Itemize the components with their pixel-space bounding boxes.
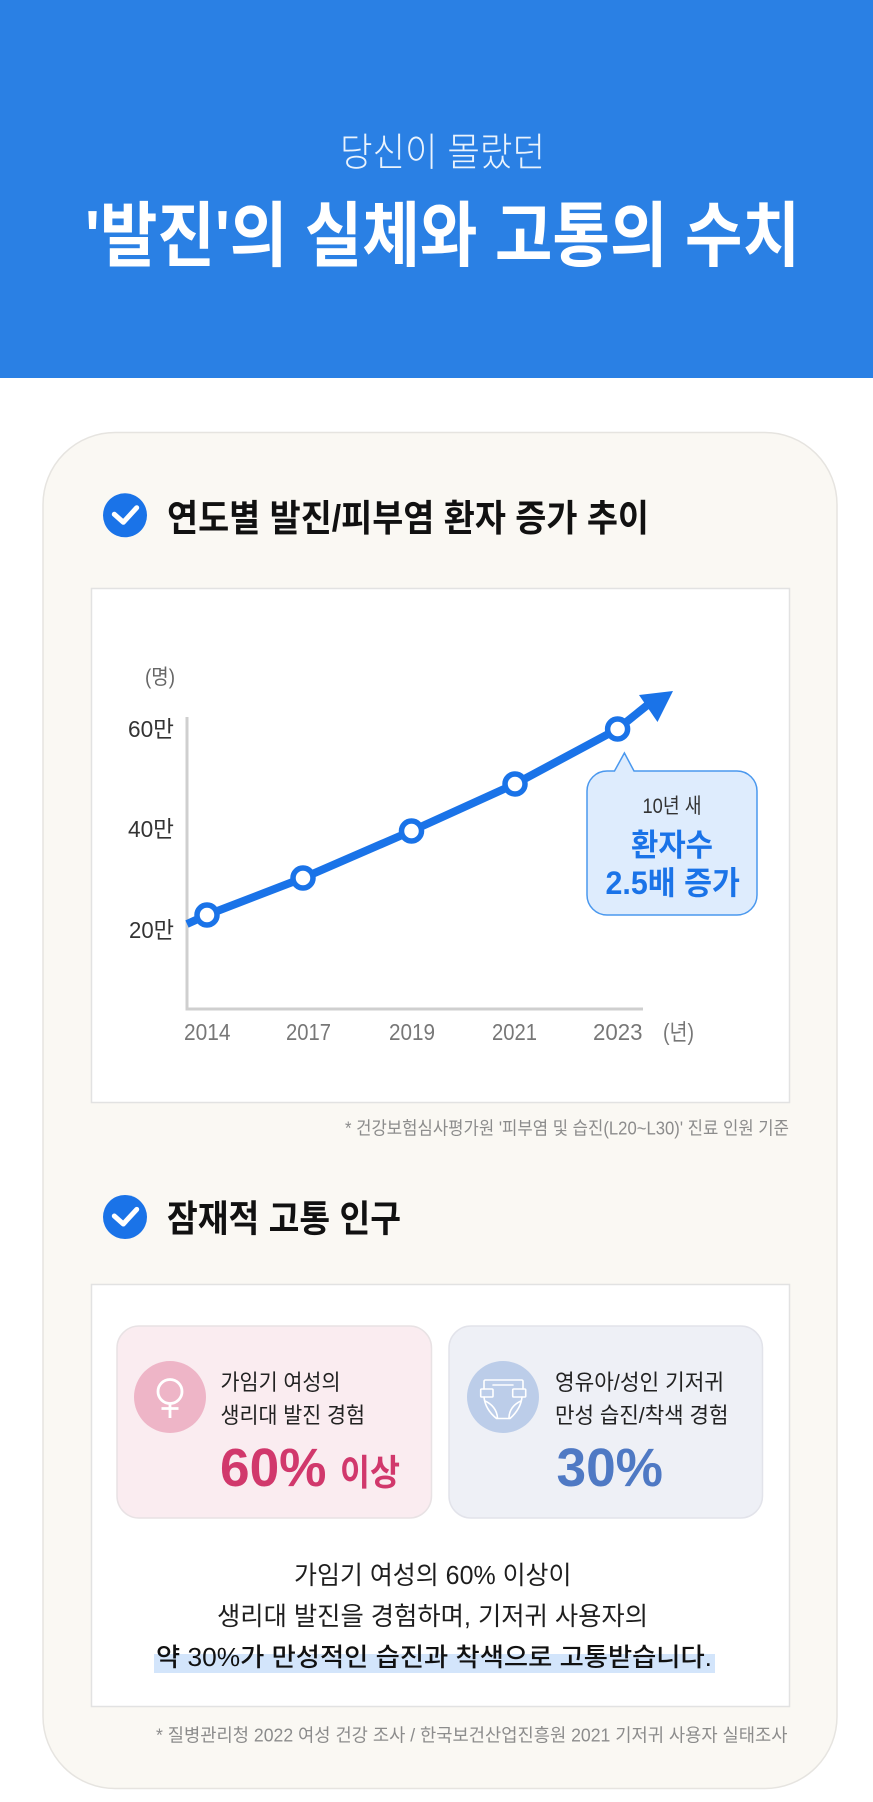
chart axes xyxy=(187,717,643,1009)
callout xyxy=(587,753,757,915)
line chart xyxy=(128,666,757,1045)
footnote: stat sources: * 질병관리청 2022 여성 건강 조사 / 한국보건산업진흥원 2021 기저귀 사용자 실태조사 xyxy=(156,1726,788,1746)
stat card: diaper users: 만성 습진/착색 경험 xyxy=(555,1403,728,1428)
x axis labels: 2014 xyxy=(184,1019,231,1045)
stat value: 30% xyxy=(556,1438,663,1498)
callout: 10년 새 xyxy=(642,795,702,818)
footnote: chart source: * 건강보험심사평가원 '피부염 및 습진(L20~L30)' 진료 인원 기준 xyxy=(345,1118,789,1138)
heading text: 잠재적 고통 인구 xyxy=(167,1198,401,1240)
y axis labels xyxy=(128,716,174,943)
x axis labels: 2023 xyxy=(593,1019,642,1045)
heading text: 연도별 발진/피부염 환자 증가 추이 xyxy=(167,498,649,539)
stat card: diaper users: 영유아/성인 기저귀 xyxy=(555,1370,724,1395)
x axis labels: 2017 xyxy=(286,1019,331,1045)
panel: line chart box xyxy=(92,588,790,1102)
stat card: women: 가임기 여성의 xyxy=(220,1370,340,1395)
icon: check badge xyxy=(103,1195,147,1239)
x axis labels: 2019 xyxy=(389,1019,435,1045)
panel: main card xyxy=(43,432,837,1788)
trend line xyxy=(187,703,650,924)
callout: 환자수 xyxy=(631,828,713,863)
y axis unit: (명) xyxy=(145,666,175,689)
panel: statistics box xyxy=(92,1284,790,1706)
summary text xyxy=(154,1562,715,1673)
main title: '발진'의 실체와 고통의 수치 xyxy=(85,198,800,276)
callout: 2.5배 증가 xyxy=(606,865,740,901)
summary text: 가임기 여성의 60% 이상이 xyxy=(294,1562,572,1590)
section heading: potential population xyxy=(103,1195,401,1240)
highlighted sentence: 약 30%가 만성적인 습진과 착색으로 고통받습니다. xyxy=(156,1644,712,1672)
data points xyxy=(197,719,628,925)
y axis labels: 60만 xyxy=(128,716,174,742)
stat card: diaper users xyxy=(449,1326,762,1518)
x axis labels: (년) xyxy=(663,1019,694,1045)
icon: female symbol xyxy=(134,1361,206,1433)
summary text: 생리대 발진을 경험하며, 기저귀 사용자의 xyxy=(217,1603,648,1631)
stat card: women: 생리대 발진 경험 xyxy=(220,1403,365,1428)
x axis labels xyxy=(184,1019,694,1045)
icon: check badge xyxy=(103,493,147,537)
stat value xyxy=(220,1438,400,1498)
header banner xyxy=(0,0,873,378)
x axis labels: 2021 xyxy=(492,1019,537,1045)
icon: diaper xyxy=(467,1361,539,1433)
y axis labels: 20만 xyxy=(129,917,174,943)
stat value: 이상 xyxy=(340,1452,400,1493)
arrow head xyxy=(639,691,673,722)
subtitle: 당신이 몰랐던 xyxy=(340,132,545,175)
section heading: yearly trend xyxy=(103,493,649,539)
stat card: women xyxy=(117,1326,432,1518)
y axis labels: 40만 xyxy=(128,816,174,842)
stat value: 60% xyxy=(220,1438,326,1498)
